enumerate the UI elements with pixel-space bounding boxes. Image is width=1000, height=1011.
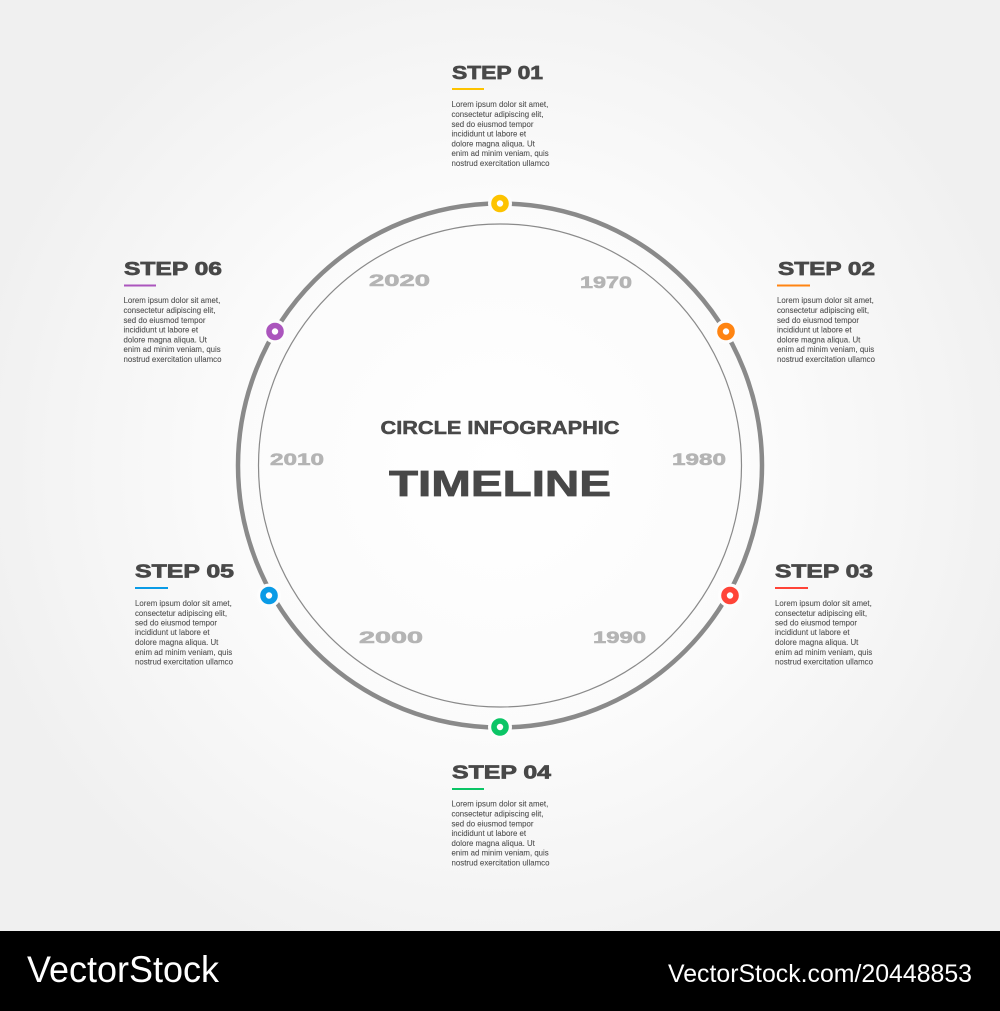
step 04 block: Lorem ipsum dolor sit amet, <box>452 800 548 808</box>
year 2020: 2020 <box>369 271 430 290</box>
step 02 block: enim ad minim veniam, quis <box>777 345 874 354</box>
step 04 block: enim ad minim veniam, quis <box>452 848 549 858</box>
step 04 block: nostrud exercitation ullamco <box>452 858 550 868</box>
marker: step 06 <box>263 320 287 344</box>
subtitle: CIRCLE INFOGRAPHIC <box>380 418 620 438</box>
step 04 block: STEP 04 <box>452 762 551 782</box>
step 01 block: dolore magna aliqua. Ut <box>452 140 536 148</box>
step 03 block: dolore magna aliqua. Ut <box>775 638 859 647</box>
step 03 block: consectetur adipiscing elit, <box>775 609 867 618</box>
step 01 block: sed do eiusmod tempor <box>452 120 534 129</box>
step 03 block: sed do eiusmod tempor <box>775 618 857 628</box>
step 06 block: STEP 06 <box>124 259 222 279</box>
step 01 block: Lorem ipsum dolor sit amet, <box>452 100 548 109</box>
year 1990: 1990 <box>593 628 646 647</box>
step 06 block: nostrud exercitation ullamco <box>124 355 222 364</box>
step 03 block: incididunt ut labore et <box>775 628 850 637</box>
step 01 block: STEP 01 <box>452 63 543 83</box>
footer bar: VectorStock.com/20448853 <box>668 960 972 988</box>
marker: step 01 <box>488 192 512 216</box>
marker: step 03 <box>718 584 742 608</box>
marker: step 02 <box>714 320 738 344</box>
step 02 block: Lorem ipsum dolor sit amet, <box>777 296 874 305</box>
footer bar: VectorStock <box>27 949 219 990</box>
step 04 block <box>452 762 551 868</box>
step 05 block: incididunt ut labore et <box>135 628 210 637</box>
year 2000: 2000 <box>359 628 423 647</box>
step 05 block: sed do eiusmod tempor <box>135 618 217 628</box>
outer ring <box>238 204 762 728</box>
step 06 block <box>124 259 222 364</box>
step 02 block: consectetur adipiscing elit, <box>777 306 869 315</box>
step 06 block: consectetur adipiscing elit, <box>124 306 216 315</box>
title: TIMELINE <box>389 463 611 504</box>
step 06 block: Lorem ipsum dolor sit amet, <box>124 296 220 305</box>
year 1970: 1970 <box>580 273 632 292</box>
inner ring <box>258 224 742 707</box>
step 06 block: dolore magna aliqua. Ut <box>124 336 208 344</box>
step 01 block: nostrud exercitation ullamco <box>452 159 550 168</box>
step 02 block: sed do eiusmod tempor <box>777 316 859 325</box>
footer bar <box>0 931 1000 1011</box>
step 04 block: sed do eiusmod tempor <box>452 820 534 828</box>
step 05 block <box>135 562 234 666</box>
step 06 block: enim ad minim veniam, quis <box>124 345 221 354</box>
step 04 block: dolore magna aliqua. Ut <box>452 839 536 848</box>
step 06 block: incididunt ut labore et <box>124 326 199 334</box>
step 03 block: STEP 03 <box>775 562 873 582</box>
year 2010: 2010 <box>270 450 324 469</box>
step 01 block: enim ad minim veniam, quis <box>452 149 549 158</box>
step 01 block <box>452 63 550 168</box>
step 03 block: nostrud exercitation ullamco <box>775 658 874 666</box>
year 1980: 1980 <box>672 450 726 469</box>
step 06 block: sed do eiusmod tempor <box>124 316 206 325</box>
step 04 block: consectetur adipiscing elit, <box>452 810 544 818</box>
step 02 block: dolore magna aliqua. Ut <box>777 336 861 344</box>
step 03 block: enim ad minim veniam, quis <box>775 648 872 657</box>
step 05 block: consectetur adipiscing elit, <box>135 609 227 618</box>
step 02 block <box>777 259 876 364</box>
marker: step 05 <box>257 584 281 608</box>
step 03 block <box>775 562 874 666</box>
step 05 block: nostrud exercitation ullamco <box>135 658 234 666</box>
step 05 block: enim ad minim veniam, quis <box>135 648 232 657</box>
step 02 block: incididunt ut labore et <box>777 326 852 334</box>
step 02 block: STEP 02 <box>778 259 875 279</box>
step 03 block: Lorem ipsum dolor sit amet, <box>775 599 872 608</box>
step 05 block: dolore magna aliqua. Ut <box>135 638 219 647</box>
step 01 block: incididunt ut labore et <box>452 130 527 138</box>
step 05 block: Lorem ipsum dolor sit amet, <box>135 599 232 608</box>
marker: step 04 <box>488 715 512 739</box>
step 02 block: nostrud exercitation ullamco <box>777 355 876 364</box>
step 01 block: consectetur adipiscing elit, <box>452 110 544 119</box>
step 05 block: STEP 05 <box>135 562 234 582</box>
step 04 block: incididunt ut labore et <box>452 829 527 838</box>
